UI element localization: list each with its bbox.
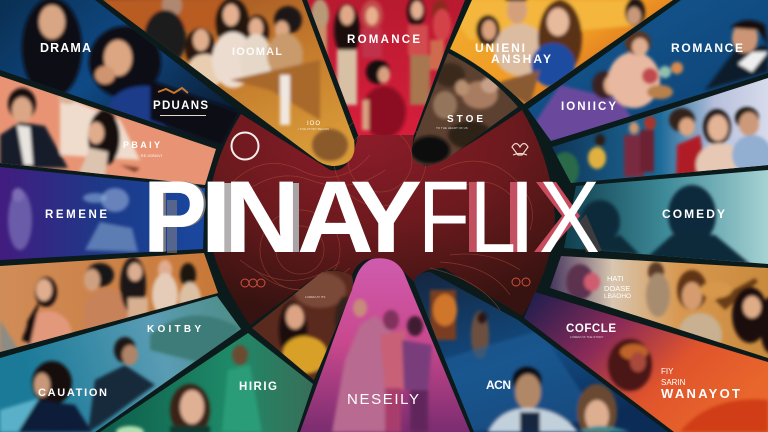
PINAY letters: N — [224, 160, 300, 274]
panel: yellow dress — [250, 268, 355, 382]
label: UNIENI — [475, 41, 526, 55]
label: ACN — [486, 378, 512, 392]
label: COMEDY — [662, 207, 726, 221]
label: LOREM AT ITS — [305, 295, 325, 299]
panel: drama — [0, 0, 250, 150]
PINAY letters — [143, 160, 422, 274]
panel: purple remene — [0, 165, 210, 265]
panel: golden group — [100, 0, 360, 170]
PINAY letters: I — [200, 160, 232, 274]
label: ANSHAY — [491, 52, 552, 66]
label — [604, 276, 631, 298]
panel: wanayot — [520, 285, 768, 432]
label: IOO — [307, 121, 320, 127]
panel: peach group — [0, 250, 220, 359]
panel: sunset trio — [450, 0, 673, 104]
label: IONIICY — [561, 101, 617, 113]
label: HATI — [607, 274, 624, 283]
icon: ring — [232, 132, 258, 160]
label: REJGBNVI — [141, 154, 163, 158]
label: PDUANS — [153, 100, 209, 112]
FLIX letters: L — [470, 160, 516, 274]
label: DOASE — [604, 284, 630, 293]
panel: coral trio — [0, 70, 220, 190]
label: ROMANCE — [671, 41, 744, 55]
label: LBAOHO — [604, 293, 631, 300]
panel: family — [550, 75, 768, 188]
panel: stoe wedge: TO THE HEART OF US — [436, 126, 468, 130]
label: IOOMAL — [232, 46, 283, 58]
panel: romance — [307, 0, 465, 135]
panel: action — [410, 265, 680, 432]
FLIX letters: F — [418, 160, 470, 274]
label: HIRIG — [239, 381, 278, 393]
PINAY letters: A — [297, 160, 374, 274]
panel: neseily — [295, 255, 475, 432]
label: NESEILY — [347, 391, 419, 408]
label: SARIN — [661, 378, 686, 387]
panel: comedy — [560, 165, 768, 265]
center swirl ornaments — [225, 114, 532, 310]
panel: center maroon medallion — [208, 110, 555, 325]
panel: hirig — [95, 330, 320, 432]
PINAY letters: P — [143, 160, 207, 274]
label: REMENE — [45, 209, 108, 221]
label: COFCLE — [566, 323, 617, 335]
label: WANAYOT — [661, 386, 741, 401]
panel: golden group: • THE STORY BEGINS — [298, 127, 329, 131]
label: PBAIY — [123, 140, 161, 150]
panel: wanayot: LOREM OF THE STORY — [570, 335, 604, 339]
extrusion: grey and red side faces — [146, 160, 602, 274]
panel: stoe wedge — [412, 53, 518, 166]
panel: film — [550, 256, 768, 358]
PINAY letters: Y — [350, 160, 422, 274]
label: DRAMA — [40, 41, 92, 55]
title — [143, 160, 602, 274]
FLIX letters: I — [508, 160, 536, 274]
label: KOITBY — [147, 324, 202, 335]
label: STOE — [447, 114, 484, 125]
panel: caution — [0, 290, 245, 432]
FLIX letters: X — [539, 160, 600, 274]
panel: blue romance — [520, 0, 768, 145]
label: CAUATION — [38, 387, 108, 399]
label: FIY — [661, 367, 674, 376]
label: ROMANCE — [347, 34, 421, 46]
FLIX letters — [418, 160, 600, 274]
icon: small emblem — [512, 144, 528, 155]
extrusion: grey and red side faces: P — [146, 160, 209, 274]
icon: knots — [241, 278, 530, 287]
